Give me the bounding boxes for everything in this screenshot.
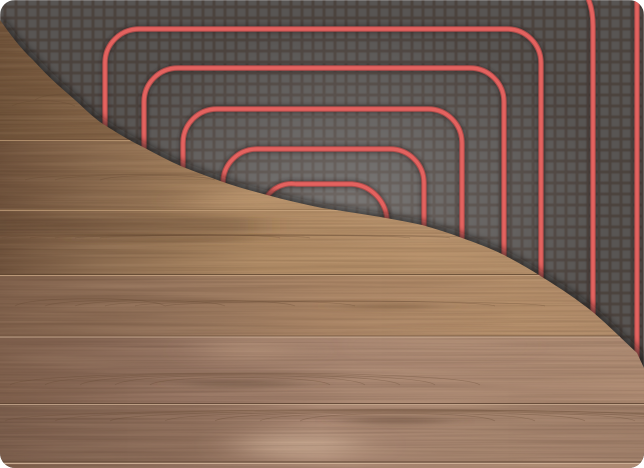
wood grain rings: [2, 94, 644, 421]
wood grain streaks: [0, 94, 644, 468]
wood blotches: [28, 190, 448, 461]
plank seams: [0, 139, 644, 464]
heating pipes: [105, 0, 637, 370]
